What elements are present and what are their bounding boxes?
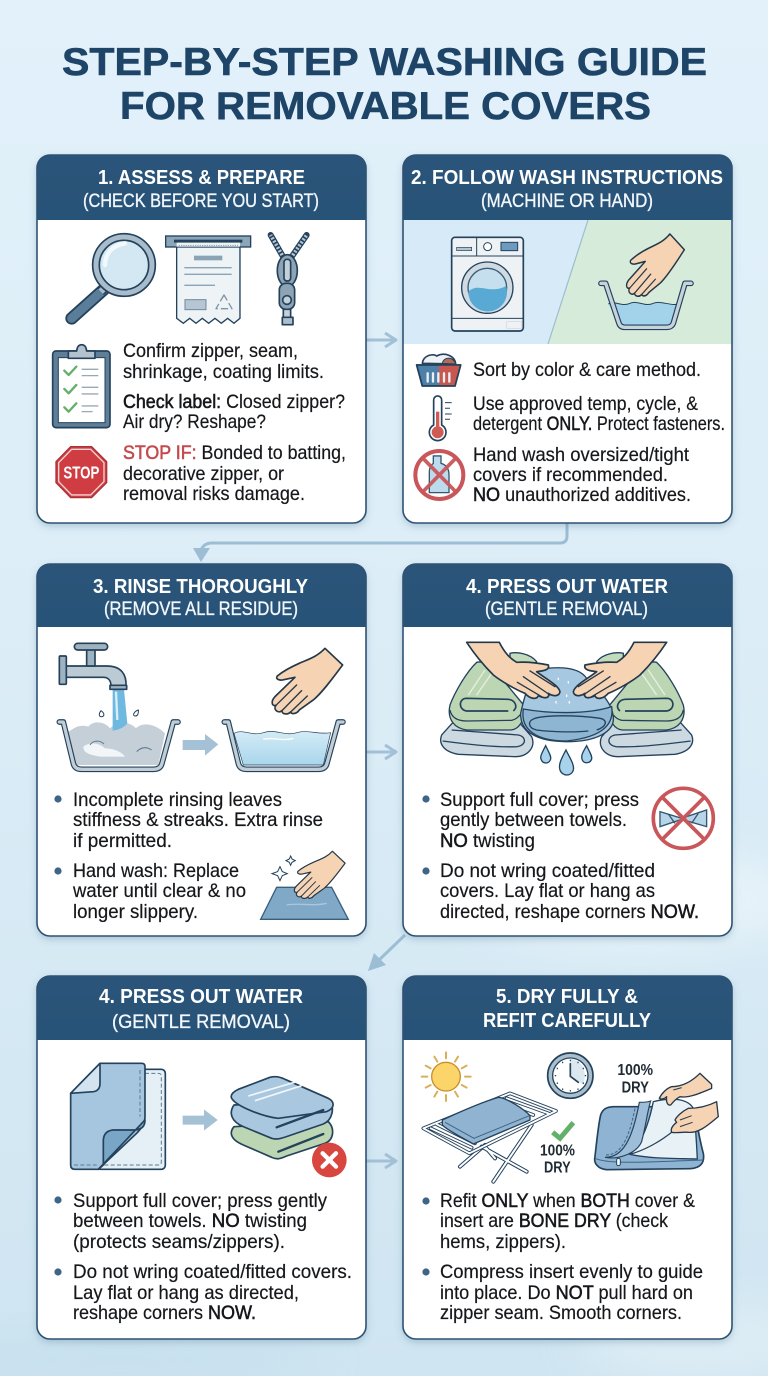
icon: thermometer [429,396,452,441]
text block: repeated step 4 bullets: (protects seams/zippers). [73,1231,285,1253]
arrow: step 3 to step 4 [366,745,396,759]
text block: repeated step 4 bullets: Do not wring coated/fitted covers. [73,1261,352,1283]
icon: clock [548,1053,593,1098]
heading: step 5: 5. DRY FULLY & [496,985,638,1008]
title [62,41,707,128]
panel: step 5 dry fully and refit [403,976,732,1339]
icon: no twisting [653,788,713,848]
heading: step 1 [83,166,319,212]
icon: zipper [271,235,307,325]
text block: step 1 instructions: shrinkage, coating limits. [123,361,324,383]
text block: step 3 bullets: Hand wash: Replace [73,860,239,882]
icon: hands refitting cover: 100% [617,1062,653,1079]
panel: step 1 assess and prepare [37,155,366,523]
text block: step 2 instructions: NO unauthorized additives. [473,484,691,506]
heading: step 5: REFIT CAREFULLY [483,1009,651,1032]
heading: step 3: (REMOVE ALL RESIDUE) [104,598,298,620]
text block: repeated step 4 bullets: Support full cover; press gently [73,1190,327,1212]
heading: step 1: (CHECK BEFORE YOU START) [83,190,319,212]
text block: step 3 bullets [54,789,323,923]
heading: step 4: (GENTLE REMOVAL) [485,598,648,620]
icon: hands refitting cover: DRY [622,1080,649,1097]
panel: step 4 repeated, press out water [37,976,366,1339]
heading: repeated step 4 [99,985,303,1033]
text block: step 4 bullets: Do not wring coated/fitted [440,860,655,882]
text block: repeated step 4 bullets: reshape corners NOW. [73,1302,256,1324]
text block: step 3 bullets: water until clear & no [72,880,246,902]
icon: sun [422,1052,471,1101]
text block: step 3 bullets: stiffness & streaks. Extra rinse [73,809,323,831]
text block: step 5 bullets: Compress insert evenly to guide [440,1261,703,1283]
text block: step 2 instructions: Sort by color & care method. [473,359,701,381]
text block: step 1 instructions: STOP IF: Bonded to batting, [123,442,346,464]
text block: step 2 instructions: covers if recommended. [473,464,668,486]
text block: repeated step 4 bullets: between towels. NO twisting [73,1210,307,1232]
text block: repeated step 4 bullets: Lay flat or hang as directed, [73,1282,299,1304]
icon: hand over wash basin [601,234,691,327]
text block: step 4 bullets: gently between towels. [440,809,627,831]
panel: step 3 rinse thoroughly [37,564,366,936]
text block: step 2 instructions [473,359,725,506]
heading: step 1: 1. ASSESS & PREPARE [98,166,305,189]
text block: step 5 bullets: into place. Do NOT pull hard on [440,1282,693,1304]
icon: cover sections [71,1063,165,1169]
heading: step 4: 4. PRESS OUT WATER [466,575,668,598]
text block: step 1 instructions: Air dry? Reshape? [123,411,266,433]
icon: no additives bottle [415,451,463,499]
icon: care label [166,236,251,323]
text block: step 4 bullets: directed, reshape corners NOW. [440,901,699,923]
icon: stacked towels with cross [231,1077,347,1177]
text block: step 3 bullets: if permitted. [73,830,172,852]
heading: step 4 [466,575,668,620]
text block: step 1 instructions: decorative zipper, or [123,463,284,485]
arrow: cover to towels [183,1109,218,1131]
text block: step 1 instructions: removal risks damage. [123,483,305,505]
title: FOR REMOVABLE COVERS [120,85,651,128]
arrow: step 2 to step 3 [193,523,567,562]
text block: step 2 instructions: detergent ONLY. Protect fasteners. [473,413,725,435]
icon: washing machine [452,237,523,331]
heading: step 2 [411,166,723,212]
heading: step 2: (MACHINE OR HAND) [481,190,653,212]
heading: step 3 [93,575,308,620]
text block: step 1 instructions [123,340,346,505]
heading: step 5 [483,985,651,1032]
arrow: step 1 to step 2 [366,333,396,347]
text block: step 5 bullets [422,1190,703,1324]
title: STEP-BY-STEP WASHING GUIDE [62,41,707,84]
text block: step 5 bullets: hems, zippers). [440,1231,566,1253]
icon: green check with 100% dry label: DRY [544,1159,571,1176]
text block: step 4 bullets: covers. Lay flat or hang as [440,880,655,902]
icon: drying rack with cover [423,1093,556,1182]
text block: step 4 bullets [422,789,699,923]
illustration background split [403,220,732,344]
panel: step 4 press out water [403,564,732,936]
heading: repeated step 4: (GENTLE REMOVAL) [112,1011,290,1033]
icon: green check with 100% dry label: 100% [540,1143,575,1160]
icon: magnifying glass [72,234,155,318]
text block: step 5 bullets: insert are BONE DRY (check [440,1210,668,1232]
icon: faucet over soapy basin [59,643,178,769]
text block: step 2 instructions: Hand wash oversized/tight [473,444,690,466]
text block: step 5 bullets: zipper seam. Smooth corners. [440,1302,682,1324]
text block: step 1 instructions: Check label: Closed zipper? [123,391,345,413]
heading: repeated step 4: 4. PRESS OUT WATER [99,985,303,1008]
text block: repeated step 4 bullets [54,1190,352,1324]
text block: step 1 instructions: Confirm zipper, seam, [123,340,298,362]
icon: hand over clean water basin [224,648,343,769]
icon: hands pressing towels [441,642,693,775]
text block: step 2 instructions: Use approved temp, cycle, & [473,393,698,415]
icon: hand feeling clean fabric [261,851,348,919]
icon: green check with 100% dry label [540,1123,575,1176]
icon: checklist clipboard [53,345,110,428]
text block: step 4 bullets: NO twisting [440,830,535,852]
arrow: step 4 to next row [368,935,405,971]
panel: step 2 follow wash instructions [403,155,732,523]
icon: stop sign [56,447,107,498]
arrow: dirty to clean water [183,734,218,756]
text block: step 4 bullets: Support full cover; press [440,789,639,811]
icon: stop sign: STOP [63,462,99,482]
text block: step 5 bullets: Refit ONLY when BOTH cover & [440,1190,695,1212]
text block: step 3 bullets: longer slippery. [73,901,198,923]
heading: step 3: 3. RINSE THOROUGHLY [93,575,308,598]
heading: step 2: 2. FOLLOW WASH INSTRUCTIONS [411,166,723,189]
icon: laundry basket [417,354,461,386]
text block: step 3 bullets: Incomplete rinsing leaves [73,789,282,811]
arrow: row 3 left to right [366,1154,396,1168]
icon: hands refitting cover [595,1062,718,1170]
